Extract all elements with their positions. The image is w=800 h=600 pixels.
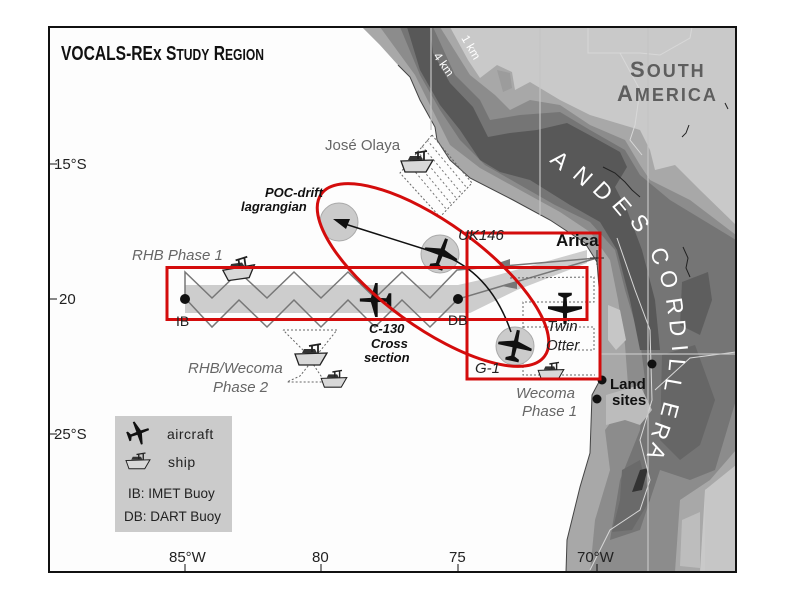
label: Andes Cordillera: R	[646, 419, 676, 443]
aircraft and platform labels: Phase 1	[522, 403, 577, 420]
label: Andes Cordillera: I	[667, 344, 693, 352]
aircraft and platform labels: Wecoma	[516, 385, 575, 402]
aircraft and platform labels: lagrangian	[241, 199, 307, 214]
label: South America	[617, 57, 718, 106]
elevation labels: 1 km	[458, 32, 484, 62]
POC-drift circles	[320, 203, 534, 365]
aircraft and platform labels: Arica	[556, 231, 599, 250]
aircraft: UK146	[420, 233, 462, 274]
ships: RHB Phase 1	[221, 256, 256, 281]
label: Andes Cordillera: R	[661, 296, 689, 316]
label: Andes Cordillera: A	[546, 145, 575, 175]
axis labels	[54, 156, 615, 566]
land sites	[592, 360, 656, 404]
axis labels: 75	[449, 549, 466, 566]
label: Andes Cordillera: E	[655, 399, 685, 421]
drift track arrow	[333, 219, 511, 332]
map frame and ticks	[49, 27, 736, 572]
legend: aircraft	[167, 426, 214, 442]
axis labels: 25°S	[54, 426, 87, 443]
study boxes and ellipse	[167, 152, 600, 398]
coastline and borders	[398, 27, 736, 572]
aircraft and platform labels: RHB/Wecoma	[188, 360, 283, 377]
aircraft and platform labels: IB	[176, 313, 189, 329]
legend icon: ship	[126, 453, 150, 469]
buoy: IB	[180, 294, 190, 304]
elevation labels	[431, 32, 484, 79]
terrain: land and elevation bands	[362, 27, 736, 572]
ship: José Olaya	[401, 151, 433, 172]
graticule lines	[431, 27, 736, 572]
axis labels: 85°W	[169, 549, 207, 566]
label: Andes Cordillera: D	[588, 176, 618, 206]
flight track: C-130 cross section band	[185, 250, 597, 327]
legend: DB: DART Buoy	[124, 509, 221, 524]
axis labels: 70°W	[577, 549, 615, 566]
label: Andes Cordillera: S	[625, 209, 655, 237]
aircraft and platform labels: UK146	[458, 227, 505, 244]
label: South America: SOUTH	[630, 57, 706, 82]
axis labels: 20	[59, 291, 76, 308]
aircraft and platform labels: C-130	[369, 321, 405, 336]
axis labels: 80	[312, 549, 329, 566]
label: Andes Cordillera: L	[663, 357, 691, 373]
label: Andes Cordillera: E	[607, 192, 637, 220]
Twin Otter survey boxes	[510, 277, 595, 375]
aircraft and platform labels: RHB Phase 1	[132, 247, 223, 264]
RHB/Wecoma Phase 2 track	[283, 330, 347, 387]
label: Andes Cordillera: N	[568, 161, 598, 191]
legend: IB: IMET Buoy	[128, 486, 215, 501]
label: Andes Cordillera: L	[659, 376, 687, 394]
legend	[115, 416, 232, 532]
ship: Wecoma Phase 1	[538, 362, 564, 379]
legend: ship	[168, 454, 196, 470]
aircraft and platform labels	[132, 185, 646, 420]
aircraft and platform labels: section	[364, 350, 410, 365]
aircraft and platform labels: G-1	[475, 360, 500, 377]
aircraft and platform labels: POC-drift	[265, 185, 323, 200]
aircraft: Twin Otter	[548, 293, 582, 324]
aircraft and platform labels: Land	[610, 376, 646, 393]
label: Andes Cordillera: A	[642, 440, 672, 465]
aircraft: G-1	[495, 327, 535, 365]
title: VOCALS-REx STUDY REGION	[61, 43, 264, 65]
label: Andes Cordillera	[546, 145, 693, 465]
aircraft and platform labels: Twin	[547, 318, 578, 335]
elevation labels: 4 km	[431, 50, 457, 79]
aircraft and platform labels: DB	[448, 312, 467, 328]
aircraft and platform labels: Otter	[546, 337, 580, 354]
axis labels: 15°S	[54, 156, 87, 173]
José Olaya survey area	[325, 135, 472, 217]
aircraft and platform labels: Phase 2	[213, 379, 269, 396]
legend icon: aircraft	[124, 418, 153, 448]
aircraft and platform labels: sites	[612, 392, 646, 409]
Arica marker	[590, 250, 604, 265]
label: South America: AMERICA	[617, 81, 718, 106]
label: José Olaya: José Olaya	[325, 137, 401, 154]
label: Andes Cordillera: D	[664, 319, 692, 337]
aircraft: C-130	[360, 283, 391, 317]
label: Andes Cordillera: C	[645, 244, 675, 268]
buoy: DB	[453, 294, 463, 304]
label: Andes Cordillera: O	[654, 267, 684, 291]
map panel	[49, 27, 736, 572]
aircraft and platform labels: Cross	[371, 336, 408, 351]
